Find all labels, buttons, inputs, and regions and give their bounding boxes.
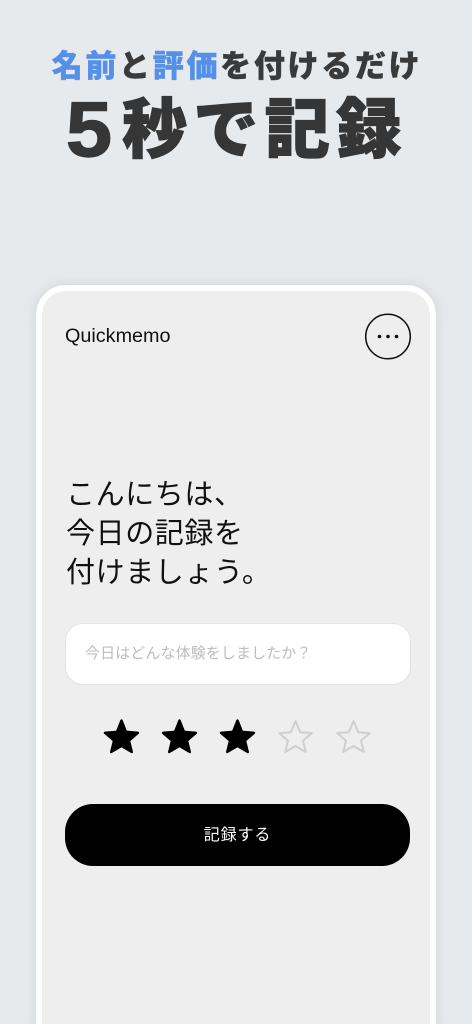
title numeral: 5 — [66, 85, 112, 173]
title text: 秒で記録 — [122, 93, 408, 166]
icon: filled star 3 — [221, 720, 254, 752]
greeting text: 付けましょう。 — [66, 557, 271, 589]
input placeholder: 今日はどんな体験をしましたか？ — [85, 645, 312, 662]
icon: filled star 2 — [163, 720, 196, 752]
panel: phone screen — [36, 285, 436, 1024]
greeting text: 今日の記録を — [66, 518, 244, 550]
greeting text — [66, 479, 271, 589]
app name: Quickmemo — [65, 325, 171, 347]
heading: title — [66, 85, 408, 173]
heading: subtitle: 名前と評価を付けるだけ — [52, 49, 422, 84]
icon: empty star 5 — [337, 721, 370, 752]
record button — [65, 804, 410, 866]
icon: filled star 1 — [105, 720, 138, 752]
icon: empty star 4 — [279, 721, 312, 752]
star rating — [104, 719, 371, 754]
text input — [65, 623, 411, 685]
record button: 記録する — [204, 827, 271, 844]
greeting text: こんにちは、 — [66, 479, 244, 511]
icon: more menu button — [364, 314, 412, 360]
